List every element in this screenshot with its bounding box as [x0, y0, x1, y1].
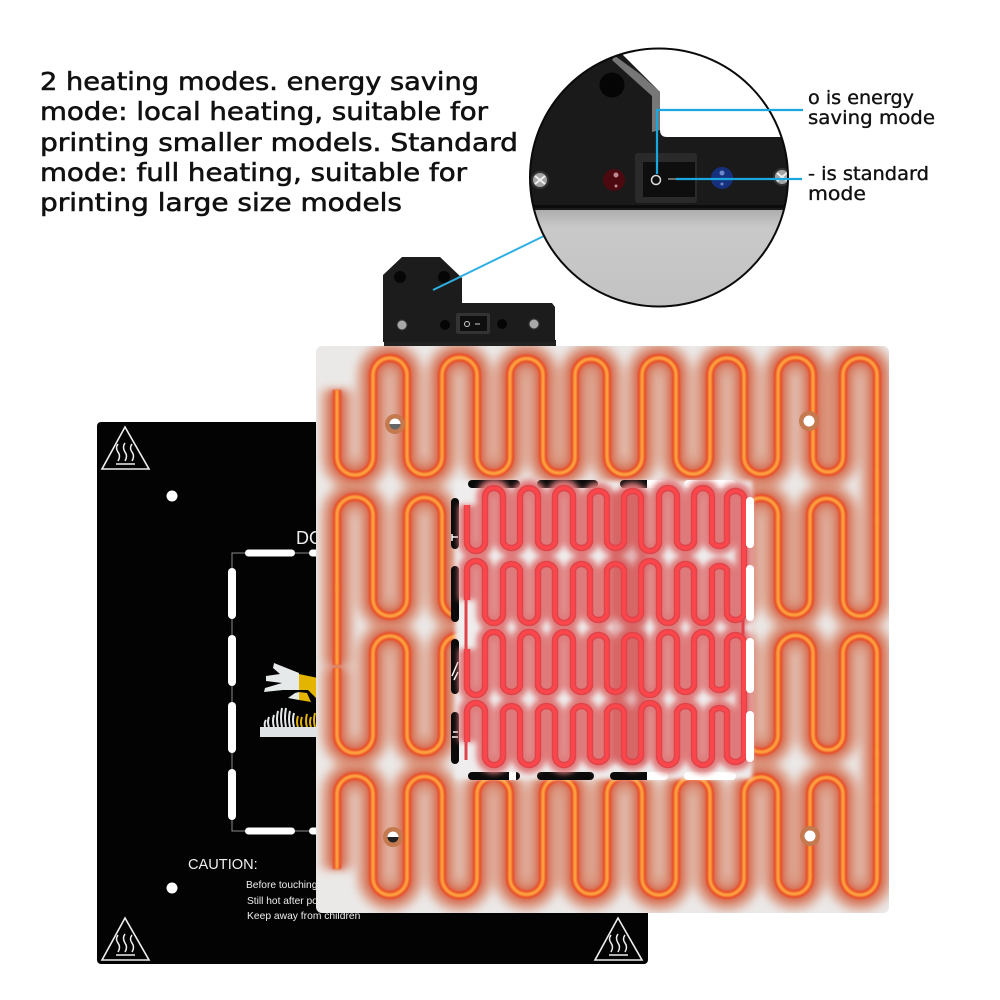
icon: hand above hot surface — [260, 663, 318, 737]
circle outline — [530, 48, 788, 306]
panel: black heated bed with warning prints — [97, 422, 648, 964]
left zone pills — [451, 498, 459, 764]
icon: hot surface warning bottom right — [595, 918, 642, 960]
callout: o is energy saving mode — [652, 87, 935, 184]
red LED — [603, 169, 625, 191]
caution text: Keep away from children — [247, 911, 361, 922]
callout: o is energy saving mode: saving mode — [808, 107, 935, 129]
pointer start over bracket — [433, 276, 462, 290]
icon: hot surface warning top left — [102, 427, 149, 469]
mounting hole top — [166, 490, 178, 502]
callout: - is standard mode: mode — [808, 183, 866, 205]
red coil core — [467, 488, 744, 765]
top zone pills — [468, 480, 736, 488]
callout: o is energy saving mode: o is energy — [808, 87, 914, 109]
outer heating coil — [337, 358, 877, 896]
coil tube edge — [337, 358, 877, 896]
coil halo — [337, 358, 877, 896]
callout: - is standard mode — [676, 163, 929, 205]
screw hole bottom left — [383, 827, 403, 847]
plate — [316, 346, 889, 913]
heading text block: printing large size models — [40, 188, 402, 217]
red coil glow — [467, 488, 744, 765]
heading text block: printing smaller models. Standard — [40, 128, 518, 157]
warning heading fragment: DO — [296, 528, 323, 548]
heading text block — [40, 67, 518, 217]
black plate — [97, 422, 648, 964]
screw hole top right — [799, 411, 819, 431]
red coil tube — [466, 488, 744, 765]
caution text: Before touching — [246, 880, 318, 891]
screw hole bottom right — [800, 826, 820, 846]
blue LED — [711, 167, 733, 189]
panel: translucent heating plate with outer coil — [316, 346, 889, 913]
heading text block: 2 heating modes. energy saving — [40, 67, 479, 96]
coil tube core — [337, 358, 877, 896]
circle background — [530, 48, 788, 306]
bottom zone pills — [468, 772, 736, 780]
pointer line to zoomed detail — [433, 235, 546, 290]
mounting hole — [600, 72, 624, 98]
screw right — [774, 169, 790, 185]
callout: - is standard mode: - is standard — [808, 163, 929, 185]
coil glow — [337, 358, 877, 896]
zoomed bracket photo — [531, 54, 787, 306]
rocker switch — [635, 153, 697, 203]
zoomed detail circle of switch bracket — [525, 40, 795, 312]
bracket rocker switch — [456, 313, 490, 334]
screw left — [532, 172, 548, 188]
bracket screws — [397, 319, 539, 330]
caution text — [246, 880, 361, 922]
dashed heating zone outline — [228, 550, 432, 834]
switch bracket — [383, 257, 556, 346]
caution text: Still hot after power off — [247, 896, 348, 907]
bracket LEDs — [440, 319, 507, 330]
right zone pills — [746, 497, 754, 762]
bracket holes — [394, 271, 450, 283]
screw hole top left — [385, 414, 405, 434]
heading text block: mode: full heating, suitable for — [40, 158, 468, 187]
darker central band — [612, 492, 646, 764]
central wash — [455, 481, 752, 779]
caution heading: CAUTION: — [188, 857, 258, 873]
icon: hot surface warning bottom left — [102, 918, 149, 960]
heading text block: mode: local heating, suitable for — [40, 97, 489, 126]
panel: energy saving central heating zone — [451, 480, 754, 780]
mounting hole bottom — [166, 882, 178, 894]
